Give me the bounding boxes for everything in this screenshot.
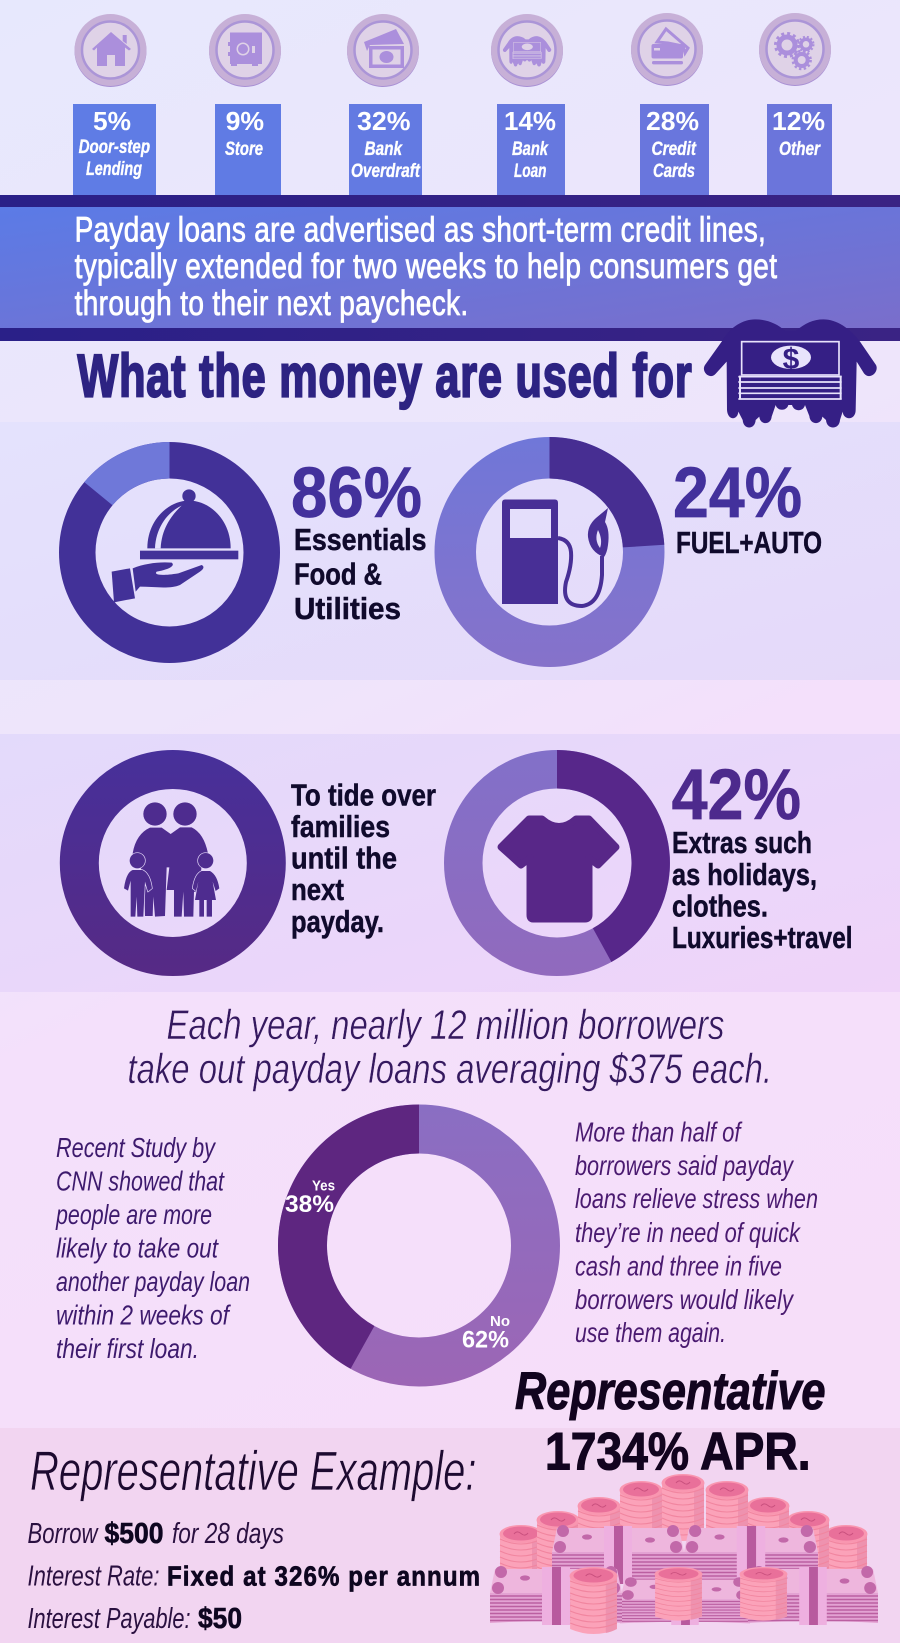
- bar: bank loan 14%: Loan: [514, 161, 546, 182]
- stat: 86% essentials: [291, 454, 426, 626]
- text: tide over families: next: [291, 872, 344, 907]
- bar: other 12%: 12%: [772, 106, 825, 136]
- text: CNN study: Recent Study by: [56, 1132, 217, 1163]
- icon: safe (store): [209, 14, 281, 87]
- panel: representative example: [0, 1428, 900, 1643]
- chart: families donut: [79, 770, 266, 956]
- stat: 86% essentials: 86%: [291, 454, 422, 533]
- chart: yes/no donut: [278, 1104, 536, 1369]
- icon: hands with money (bank loan): [491, 14, 563, 87]
- text: more than half of borrowers: [575, 1116, 818, 1348]
- heading: representative 1734% APR: [515, 1362, 826, 1482]
- icon: hands holding money: [704, 319, 877, 428]
- bar: bank loan 14%: 14%: [504, 106, 556, 136]
- icon: credit cards: [631, 13, 703, 86]
- icon: banknotes (bank overdraft): [347, 14, 419, 87]
- text: example terms: Fixed at 326% per annum: [167, 1560, 480, 1592]
- stat: 42% extras: as holidays,: [672, 857, 817, 892]
- chart: yes/no donut: Yes: [312, 1178, 335, 1195]
- bar: bank loan 14%: [497, 104, 565, 195]
- bar: other 12%: [767, 104, 832, 195]
- bar: door-step lending 5%: Lending: [86, 159, 142, 180]
- text: example terms: $50: [198, 1603, 242, 1635]
- chart: yes/no donut: No: [490, 1313, 510, 1330]
- chart: fuel donut 24%: [455, 437, 664, 646]
- text: tide over families: families: [291, 809, 390, 844]
- bar: bank loan 14%: Bank: [512, 139, 549, 160]
- text: tide over families: [291, 778, 436, 939]
- bar: door-step lending 5%: 5%: [93, 106, 131, 136]
- text: more than half of borrowers: borrowers said payday: [575, 1150, 795, 1181]
- icon: t-shirt: [501, 819, 616, 919]
- banner: payday loan definition: typically extended for two weeks to help consumers get: [75, 246, 777, 286]
- bar: credit cards 28%: Cards: [653, 161, 695, 182]
- icon: gears (other): [759, 13, 831, 86]
- text: example terms: Borrow: [28, 1518, 99, 1550]
- stat: 42% extras: clothes.: [672, 888, 768, 924]
- text: twelve million borrowers: Each year, nearly 12 million borrowers: [166, 1001, 724, 1048]
- bar: bank overdraft 32%: Bank: [364, 139, 403, 160]
- text: tide over families: until the: [291, 840, 397, 875]
- text: example terms: for 28 days: [172, 1518, 284, 1550]
- heading: representative 1734% APR: 1734% APR.: [545, 1422, 811, 1482]
- banner: payday loan definition: Payday loans are advertised as short-term credit lines,: [75, 210, 766, 249]
- panel: essentials and fuel: [0, 422, 900, 680]
- text: more than half of borrowers: they’re in need of quick: [575, 1217, 802, 1248]
- stat: 86% essentials: Utilities: [294, 591, 401, 626]
- stat: 24% fuel and auto: 24%: [673, 454, 802, 533]
- text: example terms: Interest Rate:: [28, 1560, 160, 1592]
- icon: fuel pump: [502, 500, 609, 606]
- stat: 86% essentials: Food &: [294, 557, 382, 592]
- bar: bank overdraft 32%: 32%: [357, 106, 410, 136]
- icon: hands holding money: $: [783, 343, 800, 376]
- text: CNN study: people are more: [55, 1199, 212, 1230]
- text: tide over families: To tide over: [291, 778, 436, 812]
- stat: 86% essentials: Essentials: [294, 522, 426, 557]
- chart: extras donut 42%: [463, 750, 670, 962]
- bar: credit cards 28%: [640, 104, 709, 195]
- banner: payday loan definition: through to their next paycheck.: [75, 283, 468, 323]
- bar: store 9%: [215, 104, 281, 195]
- icon: family: [124, 802, 219, 917]
- text: more than half of borrowers: More than half of: [575, 1116, 743, 1148]
- bar: door-step lending 5%: [73, 104, 156, 195]
- chart: yes/no donut: 62%: [462, 1327, 509, 1354]
- bar: credit cards 28%: Credit: [652, 139, 697, 160]
- text: twelve million borrowers: [128, 1001, 772, 1092]
- text: more than half of borrowers: cash and three in five: [575, 1250, 782, 1282]
- text: CNN study: another payday loan: [56, 1266, 250, 1297]
- heading: representative 1734% APR: Representative: [515, 1362, 826, 1421]
- stat: 24% fuel and auto: FUEL+AUTO: [676, 525, 822, 560]
- text: more than half of borrowers: loans relieve stress when: [575, 1183, 818, 1214]
- bar: bank overdraft 32%: [349, 104, 422, 195]
- heading: what the money are used for: What the money are used for: [78, 344, 692, 410]
- text: CNN study: [55, 1132, 250, 1364]
- bar: credit cards 28%: 28%: [646, 106, 699, 136]
- text: more than half of borrowers: borrowers would likely: [575, 1284, 795, 1315]
- text: CNN study: within 2 weeks of: [56, 1300, 232, 1331]
- text: CNN study: likely to take out: [56, 1232, 219, 1264]
- text: example terms: [28, 1518, 480, 1635]
- stat: 42% extras: Extras such: [672, 825, 812, 860]
- bar: store 9%: 9%: [226, 106, 264, 136]
- chart: yes/no donut: 38%: [285, 1191, 334, 1218]
- text: more than half of borrowers: use them again.: [575, 1317, 726, 1348]
- chart: essentials donut 86%: [77, 442, 262, 645]
- bar: bank overdraft 32%: Overdraft: [351, 161, 421, 182]
- stat: 42% extras: Luxuries+travel: [672, 920, 852, 955]
- text: CNN study: CNN showed that: [56, 1166, 225, 1197]
- banner: payday loan definition: [0, 195, 900, 341]
- panel: families and extras: [0, 734, 900, 992]
- illustration: money pile: [490, 1474, 878, 1634]
- bar: door-step lending 5%: Door-step: [79, 137, 150, 158]
- panel: top icons and loan sources: [73, 13, 832, 195]
- text: example terms: $500: [104, 1518, 164, 1550]
- heading: representative example: Representative Example:: [30, 1439, 476, 1502]
- icon: serving cloche and hand: [112, 489, 238, 602]
- text: CNN study: their first loan.: [56, 1333, 199, 1364]
- bar: store 9%: Store: [225, 139, 263, 160]
- bar: other 12%: Other: [779, 139, 821, 160]
- icon: house (door-step lending): [74, 14, 146, 87]
- text: example terms: Interest Payable:: [28, 1603, 190, 1635]
- text: tide over families: payday.: [291, 904, 384, 939]
- stat: 42% extras: 42%: [672, 756, 801, 835]
- stat: 42% extras: [672, 756, 852, 955]
